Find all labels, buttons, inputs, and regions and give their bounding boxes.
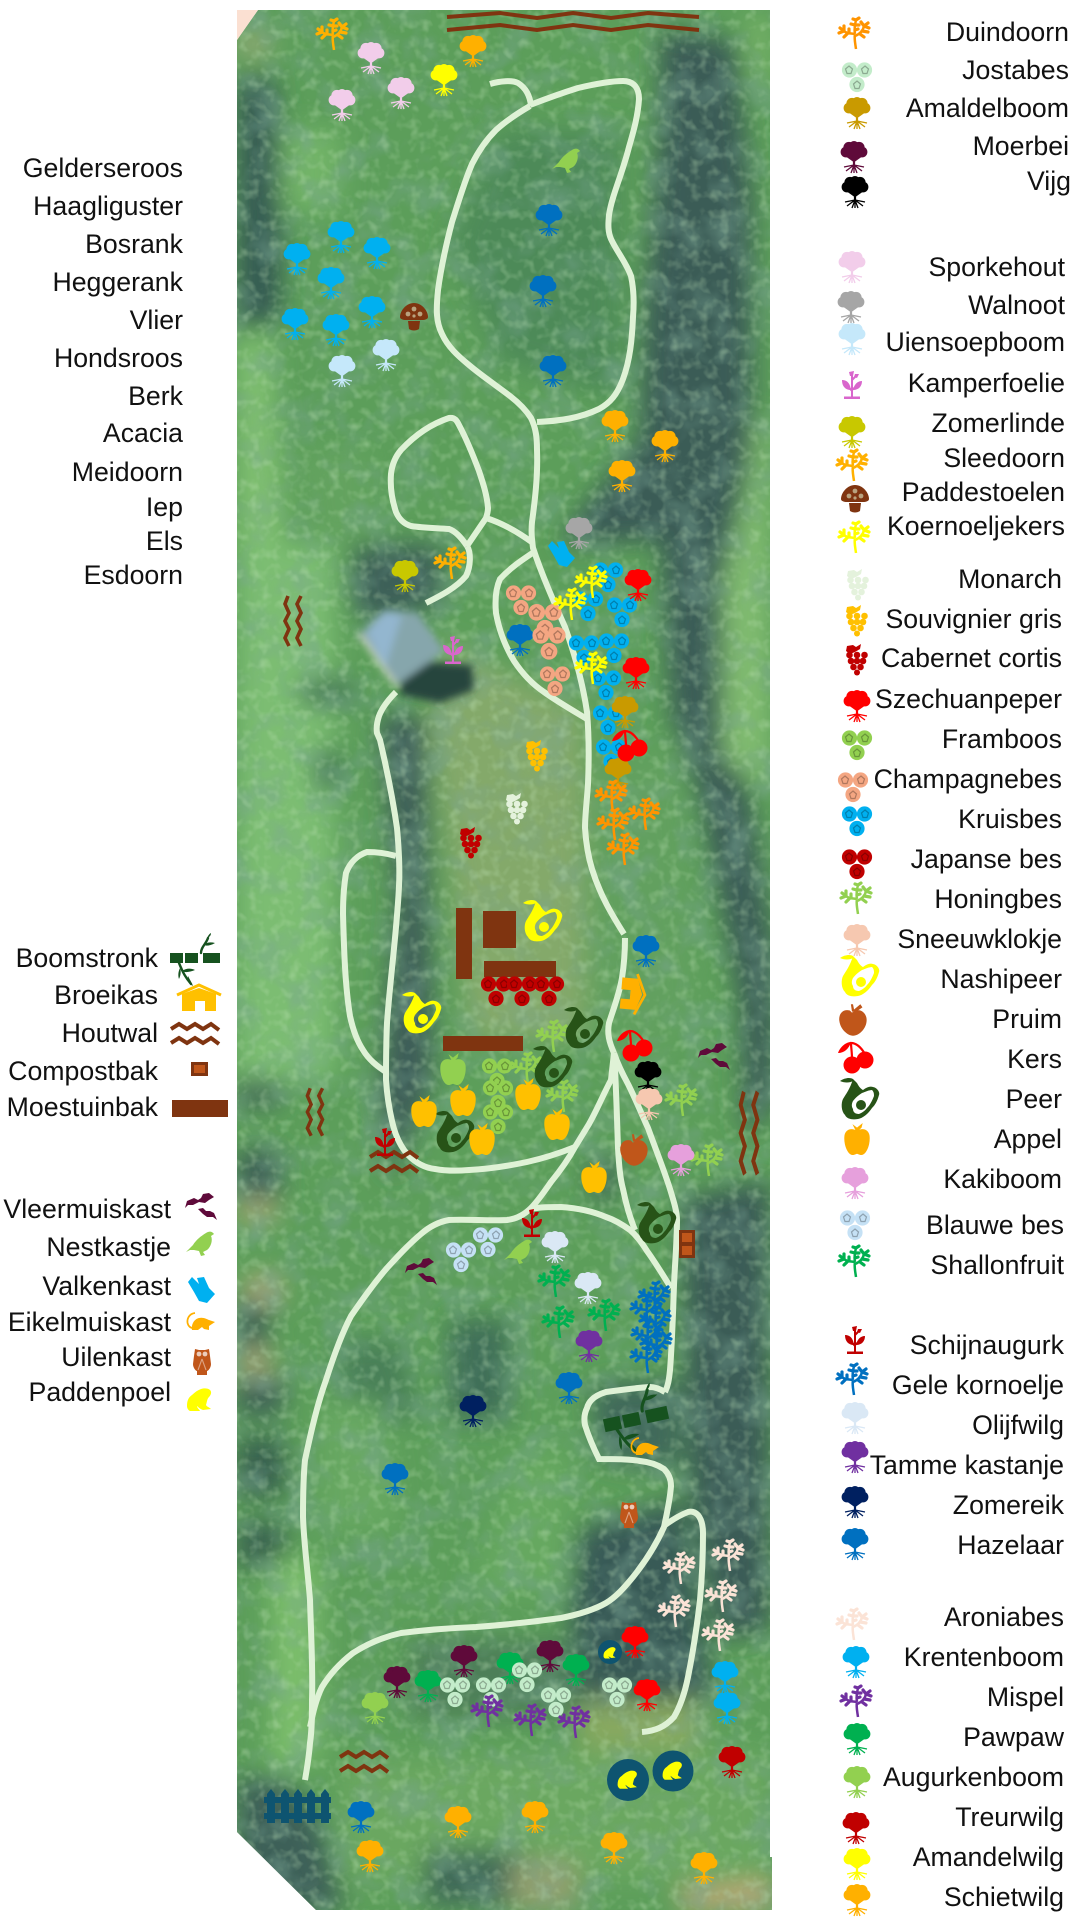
legend: plants left column: Heggerank	[52, 267, 184, 297]
map: duindoorn shrubs	[596, 781, 659, 865]
map: kakiboom	[668, 1144, 694, 1176]
map: aroniabes shrubs	[659, 1540, 743, 1651]
map: owl box	[620, 1502, 638, 1528]
legend: right column group 3	[838, 564, 1065, 1280]
legend: right column group 3: Blauwe bes	[926, 1210, 1064, 1240]
legend: right column group 5: Mispel	[987, 1682, 1064, 1712]
map: jostabes	[440, 1662, 632, 1717]
icon: peach corner of the map	[237, 10, 258, 40]
map: kruisbes bushes	[569, 562, 637, 769]
map: amaldelboom trees	[605, 696, 638, 790]
map: sleedoorn shrubs	[317, 19, 465, 579]
legend: right column group 3: Peer	[1006, 1084, 1062, 1114]
map: sneeuwklokje	[636, 1088, 662, 1120]
legend: right column group 4: Tamme kastanje	[870, 1450, 1064, 1480]
legend: right column group 5: Aroniabes	[944, 1602, 1064, 1632]
map: greenhouse	[619, 973, 647, 1015]
map: szechuanpeper trees	[622, 569, 660, 1711]
map: small toad pond	[598, 1640, 622, 1664]
legend: right column group 1: Duindoorn	[946, 17, 1069, 47]
map: falcon box	[548, 541, 575, 567]
map: kamperfoelie	[443, 636, 463, 664]
map: schietwilg trees	[357, 35, 717, 1884]
map: zomerlinde	[392, 560, 418, 592]
legend: plants left column: Haagliguster	[33, 191, 183, 221]
legend: plants left column: Meidoorn	[72, 457, 183, 487]
legend: structures	[7, 933, 228, 1122]
map: blauwe bes	[446, 1227, 503, 1272]
legend: right column group 3: Appel	[994, 1124, 1062, 1154]
map: hazelaar trees	[348, 204, 659, 1833]
legend: right column group 3: Japanse bes	[911, 844, 1062, 874]
legend: right column group 5: Augurkenboom	[883, 1762, 1064, 1792]
legend: right column group 5: Amandelwilg	[913, 1842, 1064, 1872]
map: grapes	[460, 740, 548, 858]
legend: right column group 1: Amaldelboom	[906, 93, 1069, 123]
map: dormouse box	[631, 1438, 659, 1455]
legend: right column group 4: Zomereik	[953, 1490, 1065, 1520]
legend: nest boxes: Valkenkast	[42, 1271, 172, 1301]
map: augurkenboom	[362, 1692, 388, 1724]
legend: right column group 2: Kamperfoelie	[908, 368, 1065, 398]
map: appel	[411, 1078, 607, 1193]
legend: right column group 3: Nashipeer	[940, 964, 1062, 994]
legend: right column group 5: Schietwilg	[944, 1882, 1064, 1912]
legend: right column group 2: Zomerlinde	[932, 408, 1065, 438]
legend: plants left column: Esdoorn	[84, 560, 183, 590]
panel: aerial map	[237, 10, 775, 1910]
legend: right column group 5	[837, 1602, 1065, 1916]
legend: structures: Moestuinbak	[7, 1092, 159, 1122]
legend: right column group 1: Jostabes	[962, 55, 1069, 85]
map: shallonfruit	[539, 1266, 619, 1338]
map: green apple	[440, 1053, 466, 1085]
legend: right column group 2: Sporkehout	[928, 252, 1066, 282]
map: nest box	[552, 149, 580, 173]
legend: right column group 3: Shallonfruit	[930, 1250, 1065, 1280]
map: garden beds (moestuinbak)	[443, 908, 556, 1051]
map: bird box	[504, 1240, 532, 1264]
legend: plants left column: Berk	[128, 381, 184, 411]
legend: structures: Compostbak	[8, 1056, 159, 1086]
legend: plants left column	[23, 153, 184, 590]
map: tamme kastanje	[576, 1330, 602, 1362]
legend: right column group 5: Treurwilg	[955, 1802, 1064, 1832]
map: japanse bes	[481, 976, 564, 1006]
map: krentenboom trees	[282, 221, 740, 1724]
map: olijfwilg	[542, 1231, 601, 1304]
legend: right column group 3: Framboos	[942, 724, 1062, 754]
legend: right column group 2: Paddestoelen	[902, 477, 1065, 507]
map: vijg	[635, 1061, 661, 1093]
map: walnut tree	[566, 517, 592, 549]
legend: right column group 2	[837, 251, 1066, 553]
map: koernoeljekers	[555, 567, 606, 684]
legend: right column group 3: Souvignier gris	[885, 604, 1062, 634]
legend: plants left column: Bosrank	[85, 229, 184, 259]
legend: nest boxes	[3, 1193, 217, 1411]
legend: plants left column: Hondsroos	[54, 343, 183, 373]
map: mushrooms	[400, 303, 428, 330]
map: nashipeer	[402, 900, 562, 1033]
legend: right column group 1	[839, 17, 1071, 208]
map: peer	[435, 1007, 676, 1243]
map: wood walls (houtwal)	[285, 13, 757, 1772]
legend: right column group 3: Champagnebes	[874, 764, 1062, 794]
legend: right column group 3: Sneeuwklokje	[897, 924, 1062, 954]
legend: structures: Broeikas	[54, 980, 158, 1010]
legend: nest boxes: Nestkastje	[46, 1232, 171, 1262]
legend: nest boxes: Vleermuiskast	[3, 1194, 172, 1224]
legend: plants left column: Iep	[146, 492, 183, 522]
map: sporkehout trees	[329, 42, 414, 121]
map: mispel	[472, 1696, 589, 1738]
legend: plants left column: Els	[146, 526, 183, 556]
map: pawpaw	[415, 1652, 589, 1702]
map: tree trunk	[597, 1380, 675, 1461]
legend: nest boxes: Paddenpoel	[29, 1377, 171, 1407]
legend: right column group 4: Gele kornoelje	[892, 1370, 1064, 1400]
legend: right column group 4: Hazelaar	[957, 1530, 1064, 1560]
map: schijnaugurk	[375, 1128, 542, 1237]
legend: nest boxes: Eikelmuiskast	[8, 1307, 172, 1337]
map: framboos	[482, 1058, 513, 1134]
legend: right column group 2: Walnoot	[968, 290, 1066, 320]
map: uiensoepboom trees	[329, 339, 399, 387]
legend: structures: Houtwal	[62, 1018, 158, 1048]
legend: right column group 3: Monarch	[958, 564, 1062, 594]
map: compost bin	[679, 1230, 695, 1258]
map: bat boxes	[405, 1043, 730, 1285]
map: honingbes shrubs	[511, 1021, 722, 1176]
legend: right column group 2: Uiensoepboom	[885, 327, 1065, 357]
map: champagnebes bushes	[506, 585, 570, 696]
map: amandelwilg tree	[431, 64, 457, 96]
map: toad ponds	[607, 1750, 694, 1801]
legend: right column group 3: Kakiboom	[943, 1164, 1062, 1194]
legend: right column group 4: Schijnaugurk	[910, 1330, 1065, 1360]
legend: right column group 3: Honingbes	[934, 884, 1062, 914]
legend: right column group 3: Kruisbes	[958, 804, 1062, 834]
legend: right column group 4	[837, 1326, 1065, 1560]
legend: plants left column: Gelderseroos	[23, 153, 183, 183]
legend: right column group 3: Cabernet cortis	[881, 643, 1062, 673]
legend: right column group 1: Moerbei	[973, 131, 1069, 161]
legend: right column group 2: Sleedoorn	[943, 443, 1065, 473]
legend: right column group 5: Pawpaw	[963, 1722, 1065, 1752]
legend: right column group 3: Kers	[1007, 1044, 1062, 1074]
map: treurwilg	[719, 1746, 745, 1778]
legend: right column group 3: Szechuanpeper	[875, 684, 1062, 714]
map: entrance fence	[264, 1789, 331, 1823]
legend: plants left column: Acacia	[103, 418, 183, 448]
map: pruim	[620, 1134, 648, 1166]
legend: right column group 5: Krentenboom	[904, 1642, 1064, 1672]
legend: nest boxes: Uilenkast	[61, 1342, 172, 1372]
paths	[303, 81, 703, 1780]
legend: right column group 3: Pruim	[992, 1004, 1062, 1034]
legend: right column group 1: Vijg	[1027, 166, 1071, 196]
legend: plants left column: Vlier	[130, 305, 183, 335]
map: gele kornoelje hedge	[631, 1282, 671, 1373]
legend: right column group 2: Koernoeljekers	[887, 511, 1065, 541]
map: zomereik	[460, 1395, 486, 1427]
legend: right column group 4: Olijfwilg	[972, 1410, 1064, 1440]
map: moerbei	[384, 1640, 563, 1698]
map: kers	[612, 730, 652, 1062]
legend: structures: Boomstronk	[16, 943, 159, 973]
